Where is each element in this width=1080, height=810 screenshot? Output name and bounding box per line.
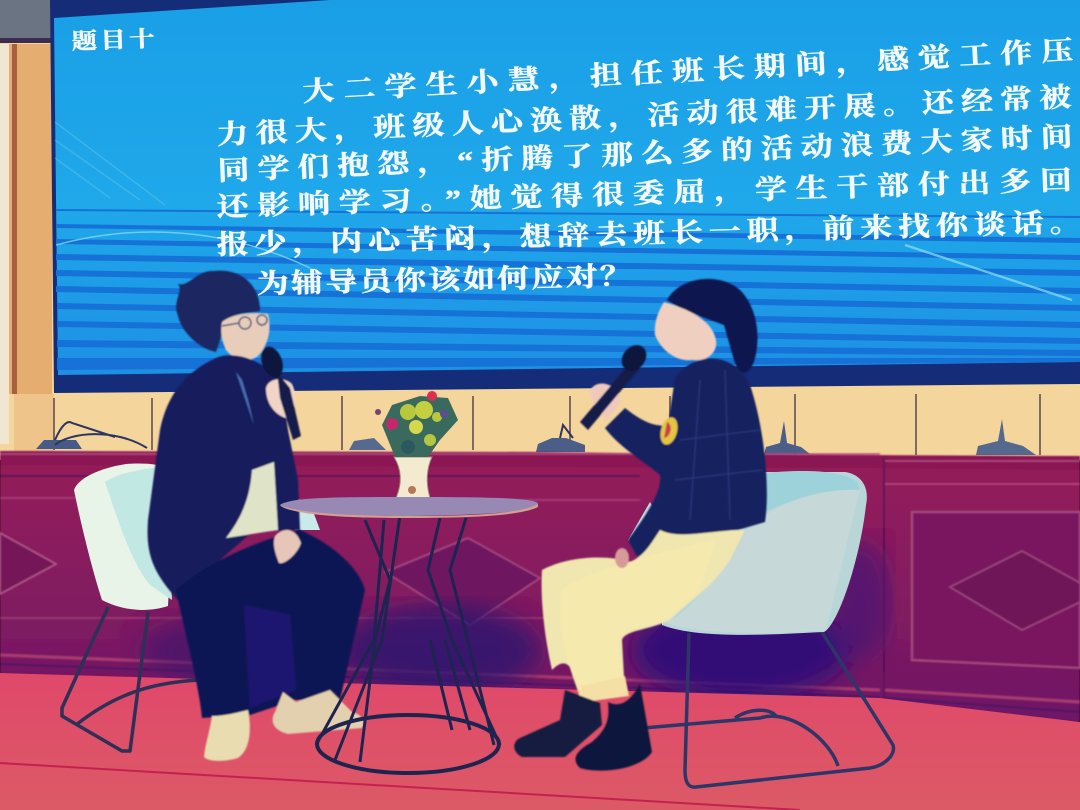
red carpet <box>0 673 1080 810</box>
right speaker <box>514 279 767 771</box>
left hand <box>615 548 629 568</box>
projection screen <box>54 0 1080 375</box>
boots <box>514 690 602 757</box>
stage front panelling <box>0 451 1080 722</box>
floor shadows <box>340 605 540 695</box>
screen text: 力很大，班级人心涣散，活动很难开展。还经常被 <box>216 82 1072 151</box>
microphone <box>257 344 301 440</box>
conference microphones on desk <box>36 419 1036 455</box>
screen frame <box>50 0 1080 393</box>
face <box>655 302 716 360</box>
left armchair <box>62 464 320 751</box>
hand on knee <box>274 530 301 563</box>
table legs <box>316 515 500 762</box>
bouquet <box>375 391 458 457</box>
wood wall panels <box>54 394 1040 455</box>
trousers <box>176 530 365 718</box>
face <box>221 313 270 360</box>
screen text: 还影响学习。”她觉得很委屈，学生干部付出多回 <box>216 165 1072 223</box>
hair <box>667 279 758 373</box>
screen stripes <box>56 209 1080 370</box>
chair legs <box>62 607 276 751</box>
inner shirt <box>226 462 278 538</box>
screen text: 题目十 <box>71 26 155 55</box>
hand holding mic <box>266 379 295 418</box>
screen text: 为辅导员你该如何应对？ <box>257 261 632 299</box>
left speaker <box>148 271 365 761</box>
small round table <box>280 497 538 773</box>
badge <box>658 415 680 447</box>
back wall <box>0 0 1080 460</box>
hair <box>176 271 260 352</box>
screen text: 同学们抱怨，“折腾了那么多的活动浪费大家时间 <box>217 122 1073 187</box>
right armchair <box>628 471 893 787</box>
screen text <box>71 26 1080 299</box>
vase <box>394 457 432 502</box>
jacket <box>148 355 300 600</box>
cream trousers <box>542 530 745 702</box>
right hand and mic <box>590 383 620 420</box>
screen text: 大二学生小慧，担任班长期间，感觉工作压 <box>302 36 1074 108</box>
decorative panel and diamonds <box>912 512 1080 668</box>
screen text: 报少，内心苦闷，想辞去班长一职，前来找你谈话。 <box>216 207 1080 261</box>
glasses <box>222 315 267 329</box>
flower vase <box>375 391 458 502</box>
chair legs <box>643 632 893 787</box>
jersey <box>605 359 767 562</box>
shoes <box>204 710 250 761</box>
